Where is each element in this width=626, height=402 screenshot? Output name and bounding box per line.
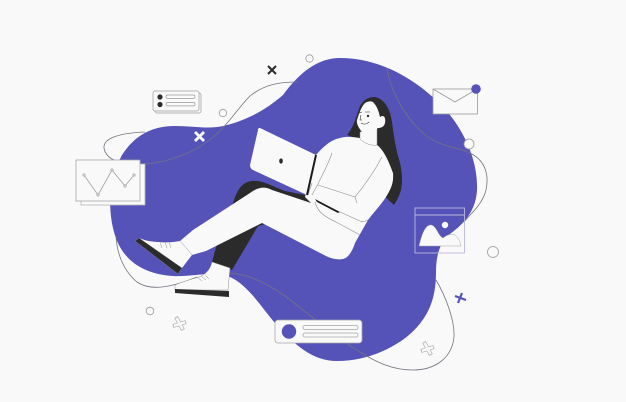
purple blob — [110, 58, 477, 361]
near leg — [180, 188, 368, 259]
icon: notification bar — [275, 320, 362, 343]
trouser and sweater lines — [180, 202, 368, 255]
cross: purple — [455, 293, 466, 303]
decorative circles — [146, 55, 498, 315]
belt strap — [315, 199, 340, 213]
cross: outline right — [421, 342, 434, 355]
woman figure — [135, 97, 402, 297]
laptop — [250, 128, 316, 195]
hair — [347, 97, 402, 205]
icon: picture window — [415, 208, 464, 253]
near shoe — [135, 238, 192, 274]
thin connecting lines — [104, 68, 487, 370]
shoe laces — [197, 275, 209, 281]
torso — [305, 137, 393, 220]
cross: outline left — [173, 317, 186, 330]
far shoe — [175, 262, 230, 297]
icon: line chart card — [76, 160, 145, 205]
neck — [360, 128, 377, 145]
icon: message card — [153, 91, 201, 113]
sweater fold lines — [308, 153, 382, 203]
icon: envelope — [433, 84, 481, 114]
far leg — [212, 181, 322, 270]
cross: white — [195, 132, 204, 141]
cross: black — [268, 66, 276, 74]
facial features — [359, 112, 370, 124]
face — [357, 101, 385, 133]
